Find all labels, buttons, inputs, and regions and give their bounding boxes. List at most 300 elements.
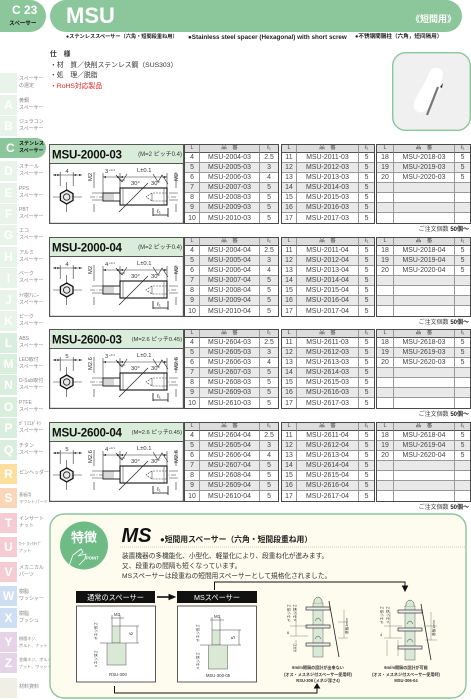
sidebar item T: ナット <box>19 523 34 529</box>
size table 2: MSU-2613-04 <box>306 452 349 459</box>
sidebar item: spacer selection: スペーサー <box>19 76 44 82</box>
size table 1: 4 <box>267 359 271 366</box>
size table 2: 12 <box>285 257 293 264</box>
technical drawing and title <box>49 329 184 409</box>
size table 2: 5 <box>365 472 368 479</box>
size table 3: ℓ₁ <box>461 330 464 336</box>
technical drawing and title <box>49 144 184 224</box>
size table 3: L <box>383 145 387 151</box>
sidebar item G <box>0 225 44 245</box>
sidebar item U: U <box>4 540 13 554</box>
stacking diagram: possible: (オス・メスネジ付スペーサー使用時) <box>372 671 441 677</box>
sidebar item Q: スペーサー <box>19 450 44 456</box>
size table 2: 5 <box>365 267 368 274</box>
size table 2: 15 <box>285 472 293 479</box>
size table 1: 3 <box>267 442 271 449</box>
size table 3: 18 <box>381 432 389 439</box>
sidebar item J: ﾅｲ樹ｱﾚﾆｰ <box>19 293 39 299</box>
size table 2: MSU-2015-04 <box>306 287 349 294</box>
sidebar item M <box>0 354 44 374</box>
technical drawing and title: L±0.1 <box>137 446 151 452</box>
size table 1 <box>184 237 279 317</box>
specification text: ・処 理／脱脂 <box>50 72 98 79</box>
sidebar item S: 基板用 <box>19 492 31 497</box>
size table 2: 14 <box>285 462 293 469</box>
size table 1: MSU-2610-04 <box>208 492 251 500</box>
size table 3: 5 <box>461 349 464 356</box>
size table 3: 20 <box>381 359 389 366</box>
sidebar item B <box>0 116 44 136</box>
sidebar item M: LED取付 <box>19 357 39 363</box>
size table 2: 5 <box>365 174 368 181</box>
sidebar item K: スペーサー <box>19 321 44 327</box>
icon: feature point badge: 特徴 <box>71 530 97 545</box>
sidebar item H <box>0 247 44 267</box>
sidebar item P: ｶﾞﾗｽｴﾎﾟｷｼ <box>19 421 42 427</box>
sidebar item K: ピーク <box>19 314 34 320</box>
size table 2: ℓ₁ <box>365 330 368 336</box>
order note: ご注文個数 50個〜 <box>419 505 469 511</box>
size table 2: MSU-2614-03 <box>306 369 349 376</box>
size table 1: 4 <box>267 267 271 274</box>
size table 1: 品 番 <box>221 330 238 336</box>
sidebar item J: J <box>5 293 12 307</box>
specification text: ・材 質／快削ステンレス鋼（SUS303） <box>50 62 177 68</box>
sidebar item X <box>0 608 39 628</box>
size table 1: 5 <box>267 204 271 211</box>
MS subtitle: ●短間用スペーサー（六角・短間段重ね用） <box>160 534 312 544</box>
size table 1: MSU-2006-04 <box>208 267 251 274</box>
technical drawing and title: 30° <box>131 274 140 280</box>
sidebar item L <box>0 333 44 353</box>
size table 1: MSU-2007-04 <box>208 277 251 284</box>
size table 2: 12 <box>285 442 293 449</box>
size table 2: 14 <box>285 369 293 376</box>
sidebar item D: D <box>4 164 13 178</box>
size table 2: L <box>287 238 291 244</box>
sidebar item T <box>0 513 44 533</box>
sidebar item P <box>0 418 44 438</box>
sidebar item Z: Z <box>5 656 12 670</box>
size table 1: 5 <box>190 257 194 264</box>
size table 3: 5 <box>461 257 464 264</box>
sidebar item G: エコ <box>19 228 29 234</box>
size table 3: 18 <box>381 154 389 161</box>
technical drawing and title: M2 <box>174 266 180 274</box>
size table 3: MSU-2618-04 <box>403 432 445 439</box>
size table 2: 14 <box>285 184 293 191</box>
sidebar item B: ジュラコン <box>19 119 44 125</box>
order note: ご注文個数 50個〜 <box>419 412 469 418</box>
normal spacer diagram: RSU-300 <box>109 672 127 677</box>
sidebar item O: PTFE <box>19 400 32 406</box>
size table 2: L <box>287 423 291 429</box>
size table 2: MSU-2015-03 <box>306 194 349 201</box>
size table 3: 5 <box>461 154 464 161</box>
size table 2: 5 <box>365 154 368 161</box>
size table 3: MSU-2620-03 <box>403 359 445 366</box>
technical drawing and title: 4 <box>65 262 69 268</box>
chapter tab C 23 <box>0 0 46 32</box>
size table 2: MSU-2017-03 <box>306 214 349 222</box>
technical drawing and title: (M=2 ピッチ0.4) <box>138 151 182 158</box>
size table 3: ℓ₁ <box>461 423 464 429</box>
size table 2: L <box>287 145 291 151</box>
technical drawing and title: ℓ₁ <box>157 209 161 215</box>
size table 1: 4 <box>190 339 194 346</box>
size table 2: 11 <box>285 339 293 346</box>
size table 1: MSU-2009-03 <box>208 204 251 211</box>
size table 3: 19 <box>381 442 389 449</box>
size table 1: MSU-2606-04 <box>208 452 251 459</box>
size table 1: 3 <box>267 164 271 171</box>
size table 1 <box>184 329 279 409</box>
sidebar item V <box>0 562 44 582</box>
technical drawing and title: M2.6 <box>88 357 94 370</box>
sidebar item A: 黄銅 <box>19 98 29 104</box>
stacking diagram: possible: 6m/m間隔の設計が可能 <box>384 664 428 670</box>
size table 3: MSU-2020-04 <box>403 267 445 274</box>
size table 2: 15 <box>285 287 293 294</box>
size table 3: 5 <box>461 359 464 366</box>
size table 1: 4 <box>267 452 271 459</box>
stacking diagram: not possible <box>284 597 353 683</box>
size table 2: 5 <box>365 400 368 406</box>
sidebar item A: スペーサー <box>19 105 44 111</box>
sidebar item X: ブッシュ <box>19 618 39 624</box>
size table 3: 5 <box>461 442 464 449</box>
size table 1: 5 <box>267 369 271 376</box>
size table 3: ℓ₁ <box>461 145 464 151</box>
size table 1 <box>184 144 279 224</box>
sidebar item materials <box>0 678 39 698</box>
sidebar item S: マウントパーツ <box>19 499 48 504</box>
size table 2 <box>281 329 375 409</box>
size table 1: 9 <box>190 482 194 489</box>
size table 2: 11 <box>285 154 293 161</box>
size table 1: MSU-2610-03 <box>208 400 251 406</box>
stacking diagram: possible: 基板1m/m <box>431 620 436 636</box>
size table 1: ℓ₁ <box>267 145 271 151</box>
size table 1: 8 <box>190 287 194 294</box>
technical drawing and title: M2.6 <box>174 450 180 463</box>
technical drawing and title: L±0.1 <box>137 168 151 174</box>
sidebar item H: アルミ <box>19 250 34 256</box>
panel: MS feature <box>49 513 471 700</box>
sidebar item P: P <box>4 421 12 435</box>
sidebar item O: O <box>4 400 13 414</box>
size table 1: 10 <box>188 492 196 500</box>
technical drawing and title: 4 <box>65 169 69 175</box>
stacking diagram: not possible: オネジ長さ <box>286 604 291 622</box>
size table 3: L <box>383 238 387 244</box>
size table 2: MSU-2615-03 <box>306 379 349 386</box>
size table 3: MSU-2620-04 <box>403 452 445 459</box>
size table 2: 5 <box>365 389 368 396</box>
size table 1: 7 <box>190 369 194 376</box>
size table 1: MSU-2006-03 <box>208 174 251 181</box>
sidebar item N <box>0 375 44 395</box>
sidebar item C active <box>0 138 46 158</box>
size table 1: MSU-2608-04 <box>208 472 251 479</box>
sidebar item J: スペーサー <box>19 300 44 306</box>
size table 2: 5 <box>365 339 368 346</box>
size table 3: 5 <box>461 174 464 181</box>
size table 1: 5 <box>267 400 271 406</box>
sidebar item D: スペーサー <box>19 171 44 177</box>
technical drawing and title: 30° <box>151 366 160 372</box>
label: normal spacer: 通常のスペーサー <box>87 593 144 602</box>
size table 1: 6 <box>190 267 194 274</box>
subtitle line: ●不锈钢間膈柱（六角，短间隔用） <box>355 34 442 40</box>
sidebar item E: PPS <box>19 186 29 192</box>
size table 1: MSU-2008-04 <box>208 287 251 294</box>
sidebar item O: スペーサー <box>19 407 44 413</box>
size table 1: 5 <box>267 194 271 201</box>
technical drawing and title <box>49 237 184 317</box>
size table 2: MSU-2012-04 <box>306 257 349 264</box>
specification text: ・RoHS対応製品 <box>50 82 102 90</box>
MS spacer diagram: M3 <box>214 614 221 619</box>
technical drawing and title: 30° <box>151 274 160 280</box>
size table 2: 5 <box>365 442 368 449</box>
size table 1: 2.5 <box>264 154 274 161</box>
size table 2: MSU-2013-04 <box>306 267 349 274</box>
size table 3: 5 <box>461 247 464 254</box>
size table 2: MSU-2616-03 <box>306 389 349 396</box>
size table 2: MSU-2613-03 <box>306 359 349 366</box>
size table 3: 20 <box>381 174 389 181</box>
size table 1: 5 <box>190 442 194 449</box>
stacking diagram: not possible: (オス・メスネジ付スペーサー使用時) <box>284 671 353 677</box>
header banner: MSU <box>66 3 115 28</box>
size table 1: 4 <box>190 154 194 161</box>
technical drawing and title: M2.6 <box>88 450 94 463</box>
technical drawing and title: 3 <box>105 354 108 360</box>
size table 1: 5 <box>267 379 271 386</box>
size table 3: L <box>383 330 387 336</box>
subtitle line: ●ステンレススペーサー（六角・短間段重ね用） <box>66 34 178 40</box>
size table 1: 4 <box>267 174 271 181</box>
size table 3: MSU-2019-04 <box>403 257 445 264</box>
size table 2: 13 <box>285 267 293 274</box>
size table 1: 5 <box>267 277 271 284</box>
size table 1: MSU-2007-03 <box>208 184 251 191</box>
label: normal spacer <box>76 591 155 603</box>
sidebar item Y <box>0 632 48 652</box>
technical drawing and title: 30° <box>151 181 160 187</box>
size table 2: MSU-2617-04 <box>306 492 349 500</box>
size table 3 <box>376 237 471 317</box>
size table 1: ℓ₁ <box>267 330 271 336</box>
size table 2: 17 <box>285 400 293 406</box>
subtitle line <box>66 32 442 41</box>
size table 1: 9 <box>190 204 194 211</box>
normal spacer diagram: オネジ長さ <box>93 622 98 640</box>
sidebar item C active: C <box>6 141 15 155</box>
size table 1: ℓ₁ <box>267 238 271 244</box>
specification text <box>50 50 177 90</box>
sidebar item V: メカニカル <box>19 565 44 571</box>
size table 2: 5 <box>365 297 368 304</box>
technical drawing and title: +0.1 <box>109 168 115 172</box>
size table 1: MSU-2009-04 <box>208 297 251 304</box>
size table 1: MSU-2607-03 <box>208 369 251 376</box>
stacking diagram: possible: メネジ深さ <box>385 606 390 624</box>
size table 2: ℓ₁ <box>365 423 368 429</box>
header banner <box>50 0 462 32</box>
specification text: 仕 様 <box>50 51 70 58</box>
sidebar item B: スペーサー <box>19 126 44 132</box>
size table 1: 6 <box>190 359 194 366</box>
size table 3 <box>376 329 471 409</box>
order note: ご注文個数 50個〜 <box>419 320 469 326</box>
sidebar item U: ｶｰﾄﾞﾛｯｸﾀｲﾌﾟ <box>19 541 42 546</box>
size table 2: MSU-2011-03 <box>306 154 349 161</box>
technical drawing and title: (M=2.6 ピッチ0.45) <box>132 336 182 343</box>
size table 2: MSU-2612-03 <box>306 349 349 356</box>
size table 2: 17 <box>285 308 293 314</box>
technical drawing and title: +0.1 <box>109 261 115 265</box>
sidebar item W: 樹脂 <box>19 589 29 595</box>
panel: MSU-2600-04 <box>49 422 471 502</box>
size table 1: MSU-2604-04 <box>208 432 251 439</box>
MS spacer diagram <box>178 606 256 682</box>
sidebar item S <box>0 488 48 508</box>
sidebar item T: インサート <box>19 516 44 522</box>
size table 3: 5 <box>461 267 464 274</box>
order note: ご注文個数 50個〜 <box>419 227 469 233</box>
size table 2: 品 番 <box>319 238 336 244</box>
size table 2: 5 <box>365 194 368 201</box>
size table 3: MSU-2618-03 <box>403 339 445 346</box>
size table 3: 20 <box>381 267 389 274</box>
technical drawing and title: 30° <box>151 459 160 465</box>
size table 2: ℓ₁ <box>365 238 368 244</box>
size table 2: 5 <box>365 287 368 294</box>
technical drawing and title: MSU-2600-04 <box>52 426 123 440</box>
sidebar item: spacer selection <box>0 73 44 93</box>
size table 2: MSU-2013-03 <box>306 174 349 181</box>
size table 3: 18 <box>381 339 389 346</box>
sidebar item K: K <box>4 314 13 328</box>
size table 2: 5 <box>365 379 368 386</box>
size table 3: 品 番 <box>416 145 432 151</box>
sidebar item W: W <box>3 589 14 603</box>
size table 1: 6 <box>190 452 194 459</box>
size table 3: MSU-2619-03 <box>403 349 445 356</box>
size table 3 <box>376 144 471 224</box>
technical drawing and title <box>49 422 184 502</box>
size table 1: 8 <box>190 379 194 386</box>
icon: feature point badge: POINT <box>86 556 99 560</box>
sidebar item F: F <box>5 207 12 221</box>
size table 2: 5 <box>365 308 368 314</box>
size table 2: 5 <box>365 204 368 211</box>
label: MS spacer: MSスペーサー <box>194 593 240 602</box>
description text: 装置機器の多機能化、小型化、軽量化により、段重ね化が進みます。 <box>122 551 328 560</box>
size table 3: 品 番 <box>416 423 432 429</box>
size table 2: 5 <box>365 482 368 489</box>
sidebar item V: V <box>4 565 12 579</box>
size table 1: L <box>190 330 194 336</box>
size table 1: 5 <box>267 214 271 222</box>
size table 3: 品 番 <box>416 238 432 244</box>
size table 3: MSU-2019-03 <box>403 164 445 171</box>
size table 3: 20 <box>381 452 389 459</box>
description text: 又、段重ねの間隔も短くなっています。 <box>122 561 241 570</box>
normal spacer diagram: M3 <box>114 612 121 617</box>
sidebar item I <box>0 268 44 288</box>
sidebar item G: G <box>4 228 13 242</box>
size table 1: ℓ₁ <box>267 423 271 429</box>
MS spacer diagram: オネジ長さ <box>195 624 200 642</box>
size table 3: 18 <box>381 247 389 254</box>
sidebar item U: ナット <box>19 548 31 553</box>
size table 2: 5 <box>365 164 368 171</box>
sidebar item R <box>0 464 49 484</box>
size table 2: 13 <box>285 174 293 181</box>
sidebar item M: スペーサー <box>19 364 44 370</box>
size table 1: 3 <box>267 349 271 356</box>
sidebar item G: スペーサー <box>19 235 44 241</box>
size table 1: MSU-2604-03 <box>208 339 251 346</box>
size table 1: MSU-2606-03 <box>208 359 251 366</box>
technical drawing and title: (M=2.6 ピッチ0.45) <box>132 429 182 436</box>
size table 3: 5 <box>461 339 464 346</box>
stacking diagram: not possible: RSU-306 (メネジ深さ4) <box>296 677 340 683</box>
size table 1: MSU-2008-03 <box>208 194 251 201</box>
size table 1: 5 <box>190 349 194 356</box>
size table 1: MSU-2609-04 <box>208 482 251 489</box>
size table 1: MSU-2609-03 <box>208 389 251 396</box>
sidebar item L: スペーサー <box>19 343 44 349</box>
sidebar item N: D-Sub取付 <box>19 378 43 384</box>
size table 2: 5 <box>365 247 368 254</box>
size table 2: 15 <box>285 194 293 201</box>
MS spacer diagram: MSU-300-05 <box>206 673 231 678</box>
size table 1: MSU-2607-04 <box>208 462 251 469</box>
sidebar item D: スチール <box>19 164 39 170</box>
sidebar item Y: Y <box>4 635 12 649</box>
stacking diagram: not possible: 6 <box>287 630 290 635</box>
size table 3: 5 <box>461 432 464 439</box>
technical drawing and title: (M=2 ピッチ0.4) <box>138 244 182 251</box>
technical drawing and title: L±0.1 <box>137 261 151 267</box>
size table 1 <box>184 422 279 502</box>
sidebar item F <box>0 204 44 224</box>
size table 2 <box>281 237 375 317</box>
sidebar item B: B <box>4 119 13 133</box>
technical drawing and title: ℓ₁ <box>157 302 161 308</box>
size table 1: 2.5 <box>264 339 274 346</box>
stacking diagram: not possible: 3.5で <box>293 643 297 652</box>
size table 2: 品 番 <box>319 330 336 336</box>
sidebar item O <box>0 397 44 417</box>
sidebar item J <box>0 290 44 310</box>
chapter tab C 23: C 23 <box>12 3 37 17</box>
sidebar item L: L <box>5 336 12 350</box>
sidebar item Q: チタン <box>19 443 34 449</box>
icon: feature point badge <box>60 522 108 570</box>
size table 1: MSU-2010-03 <box>208 214 251 222</box>
sidebar item K <box>0 311 44 331</box>
size table 2: MSU-2017-04 <box>306 308 349 314</box>
stacking diagram: not possible: 基板1m/m <box>344 618 349 634</box>
technical drawing and title: 4 <box>105 262 109 268</box>
size table 2: 16 <box>285 482 293 489</box>
panel: MSU-2000-04 <box>49 237 471 317</box>
